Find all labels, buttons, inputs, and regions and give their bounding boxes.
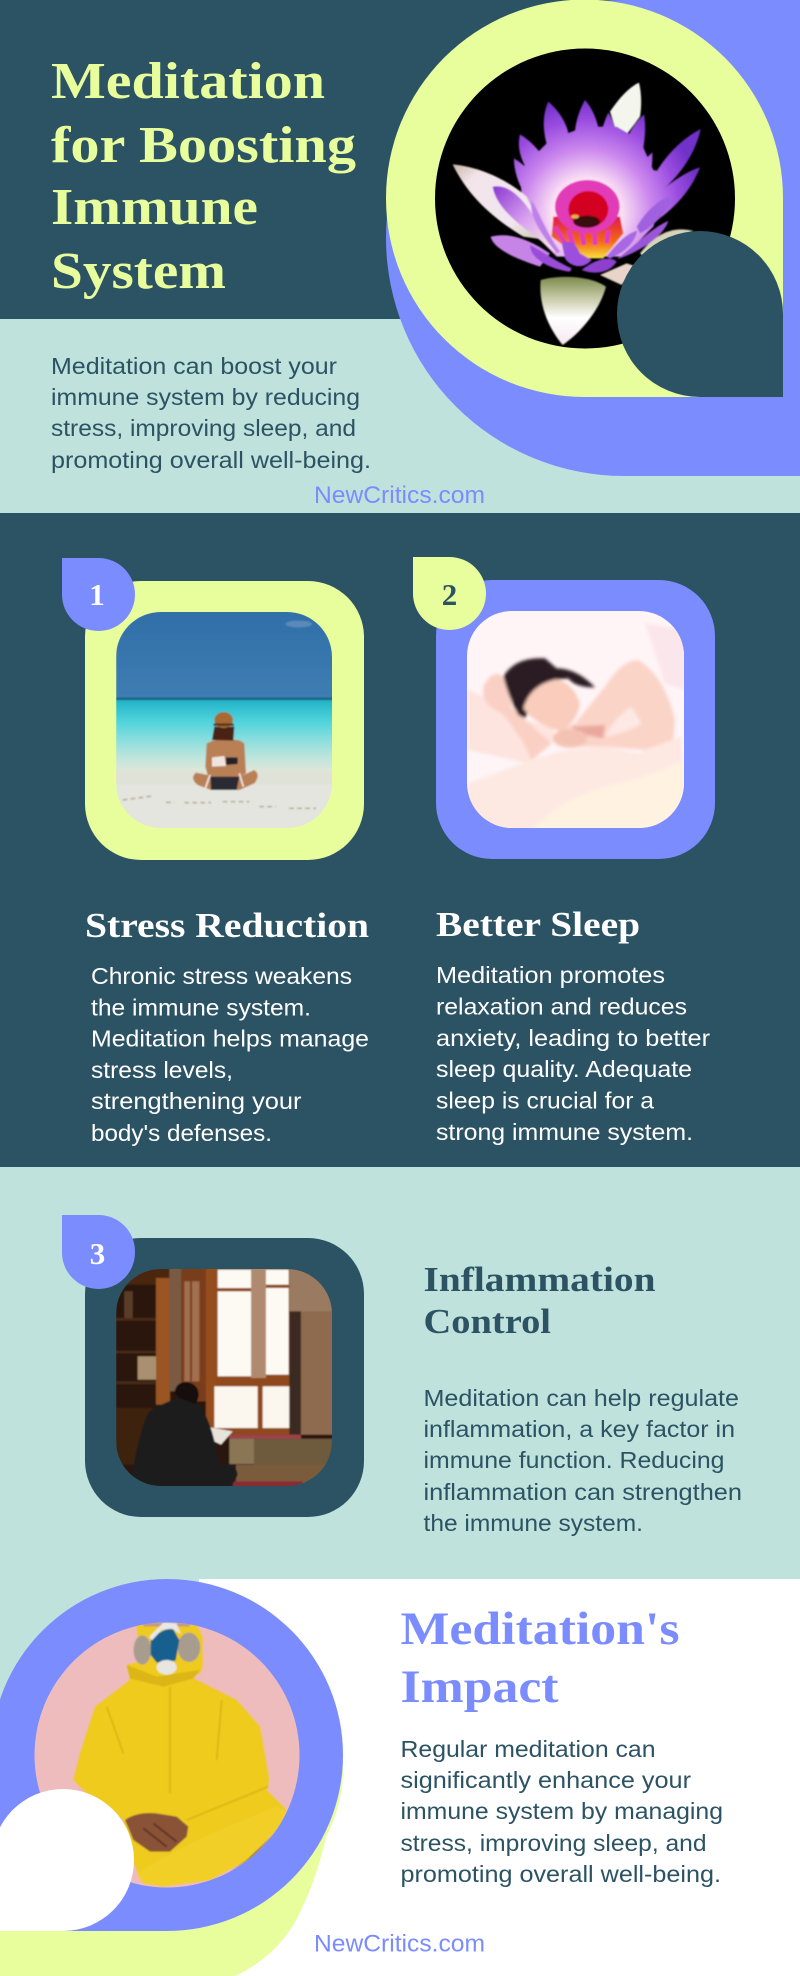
panel: stress reduction	[62, 558, 369, 1146]
text: inflammation body: Meditation can help regulate	[424, 1385, 739, 1411]
text: better sleep body: anxiety, leading to better	[436, 1025, 710, 1051]
panel: better sleep	[413, 557, 715, 1145]
image: man reading by window	[116, 1268, 336, 1488]
text: impact body: stress, improving sleep, and	[400, 1830, 706, 1856]
intro text: immune system by reducing	[51, 384, 360, 410]
title: System	[51, 243, 226, 300]
panel: inflammation control	[62, 1215, 742, 1536]
card frame 3	[85, 1238, 364, 1517]
text: better sleep body: relaxation and reduces	[436, 994, 687, 1020]
text: stress reduction body: Meditation helps manage	[91, 1026, 369, 1052]
heading: inflammation control: Inflammation	[424, 1260, 656, 1299]
watermark: NewCritics.com	[314, 482, 485, 509]
card frame 1	[85, 581, 364, 860]
text: impact body: immune system by managing	[400, 1798, 723, 1824]
text: better sleep body: Meditation promotes	[436, 962, 665, 988]
heading: meditation's impact: Impact	[400, 1661, 559, 1713]
text: impact body: significantly enhance your	[400, 1767, 691, 1793]
title: for Boosting	[51, 117, 356, 174]
shape: white teardrop	[0, 1789, 134, 1931]
header shape: dark teardrop	[617, 231, 783, 397]
text: impact body: Regular meditation can	[400, 1736, 656, 1762]
title	[51, 53, 356, 300]
text: impact body	[400, 1736, 723, 1887]
heading: meditation's impact	[400, 1603, 680, 1713]
text: better sleep body	[436, 962, 710, 1145]
image: person in yellow suit	[30, 1620, 305, 1895]
heading: inflammation control: Control	[424, 1302, 551, 1341]
text: better sleep body: strong immune system.	[436, 1119, 693, 1145]
text: inflammation body: the immune system.	[424, 1510, 643, 1536]
text: stress reduction body: the immune system.	[91, 994, 311, 1020]
image: woman on beach	[116, 610, 336, 831]
heading: meditation's impact: Meditation's	[400, 1603, 680, 1655]
text: inflammation body: immune function. Reducing	[424, 1447, 724, 1473]
text: stress reduction body: strengthening your	[91, 1088, 302, 1114]
text: stress reduction body: stress levels,	[91, 1057, 233, 1083]
heading: inflammation control	[424, 1260, 656, 1341]
text: stress reduction body: body's defenses.	[91, 1120, 272, 1146]
text: stress reduction body: Chronic stress weakens	[91, 963, 352, 989]
intro text: stress, improving sleep, and	[51, 415, 356, 441]
panel: meditation's impact	[0, 1579, 723, 1976]
image: water lily on black	[435, 48, 735, 348]
title: Meditation	[51, 53, 325, 110]
number badge 3	[62, 1215, 135, 1289]
text: better sleep body: sleep quality. Adequate	[436, 1056, 692, 1082]
text: inflammation body	[424, 1385, 742, 1536]
number badge 2: 2	[442, 577, 457, 612]
number badge 1: 1	[89, 577, 105, 612]
heading: stress reduction: Stress Reduction	[85, 906, 369, 945]
header shape: yellow teardrop	[386, 0, 783, 397]
panel: header	[51, 0, 800, 509]
number badge 1	[62, 558, 135, 631]
shape: yellow backdrop	[0, 1760, 343, 1976]
shape: periwinkle teardrop	[0, 1579, 343, 1931]
intro text	[51, 353, 371, 473]
card frame 2	[436, 580, 715, 859]
image: woman sleeping	[465, 610, 685, 830]
number badge 2	[413, 557, 486, 630]
heading: better sleep: Better Sleep	[436, 905, 640, 944]
intro text: promoting overall well-being.	[51, 447, 371, 473]
text: better sleep body: sleep is crucial for a	[436, 1088, 655, 1114]
title: Immune	[51, 179, 258, 236]
header shape: periwinkle backdrop	[386, 0, 800, 476]
text: inflammation body: inflammation, a key factor in	[424, 1416, 735, 1442]
text: inflammation body: inflammation can strengthen	[424, 1479, 742, 1505]
number badge 3: 3	[90, 1236, 105, 1271]
text: stress reduction body	[91, 963, 369, 1146]
watermark footer: NewCritics.com	[314, 1930, 485, 1958]
intro text: Meditation can boost your	[51, 353, 337, 379]
text: impact body: promoting overall well-being.	[400, 1861, 721, 1887]
